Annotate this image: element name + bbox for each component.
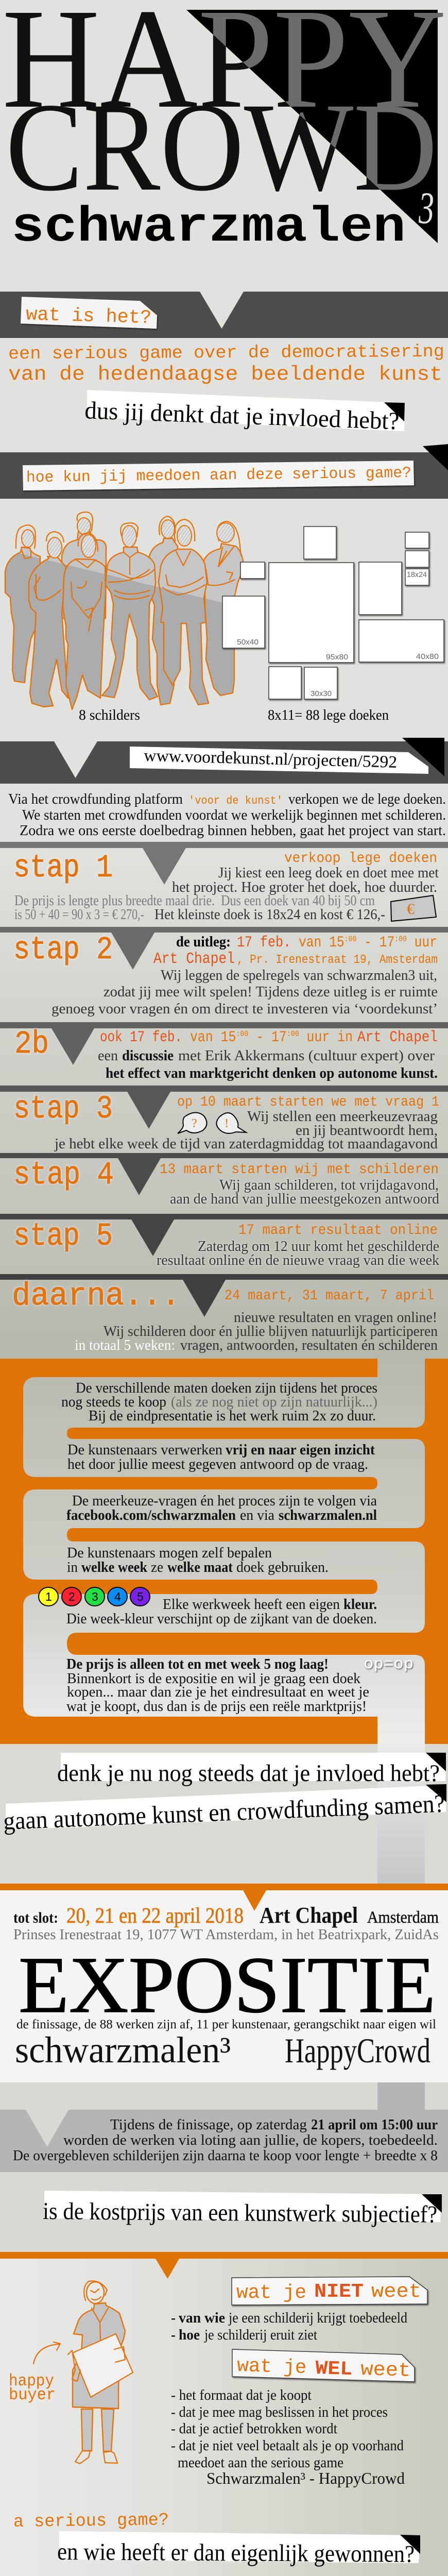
op=op label: op=op — [364, 1656, 413, 1673]
painter back left — [61, 512, 106, 618]
body: het project. Hoe groter het doek, hoe duurder. — [172, 879, 437, 895]
body: Het kleinste doek is 18x24 en kost € 126,- — [154, 907, 385, 923]
list: wel: Schwarzmalen³ - HappyCrowd — [206, 2469, 405, 2487]
heading: stap 1 — [13, 850, 113, 886]
painter front woman — [159, 519, 209, 705]
panel: exhibition — [0, 1884, 448, 2082]
date line: verkoop lege doeken — [284, 851, 437, 867]
ribbon text 5: kleur. — [343, 1597, 377, 1613]
winding ribbon — [23, 1359, 425, 1884]
icon: speech bubbles — [178, 1112, 246, 1133]
label happy buyer — [9, 2371, 56, 2404]
text: Tijdens de finissage, op zaterdag — [110, 2117, 307, 2133]
band: hoe kun jij meedoen — [0, 444, 448, 499]
ribbon text 2: vrij en naar eigen inzicht — [226, 1442, 375, 1458]
body: is 50 + 40 = 90 x 3 = € 270,- — [14, 907, 144, 923]
ribbon text 1: nog steeds te koop — [61, 1394, 166, 1410]
ribbon text 3: De meerkeuze-vragen én het proces zijn te volgen via — [72, 1493, 377, 1509]
heading: stap 3 — [13, 1091, 113, 1127]
ribbon text 6: wat je koopt, dus dan is de prijs een reële marktprijs! — [66, 1699, 367, 1715]
list: wel: - dat je actief betrokken wordt — [171, 2421, 337, 2437]
notch — [200, 292, 244, 329]
week colour circles: 1 — [45, 1590, 52, 1603]
heading EXPOSITIE: EXPOSITIE — [19, 1940, 436, 2029]
body: Wij stellen een meerkeuzevraag — [247, 1109, 438, 1125]
url text: www.voordekunst.nl/projecten/5292 — [144, 747, 398, 772]
canvas size labels: 50x40 — [237, 638, 259, 647]
body: je hebt elke week de tijd van zaterdagmiddag tot maandagavond — [54, 1136, 438, 1152]
steps background panel — [0, 848, 448, 1359]
date line: :00 — [287, 1029, 299, 1039]
tag: wat je NIET weet: NIET — [314, 2281, 364, 2303]
heading: stap 2 — [13, 931, 113, 968]
ribbon text 1: De verschillende maten doeken zijn tijdens het proces — [76, 1380, 377, 1396]
date line: uur in — [299, 1029, 353, 1046]
date lines: - 17 — [356, 934, 394, 952]
notch — [54, 741, 97, 778]
text: De overgebleven schilderijen zijn daarna te koop voor lengte + breedte x 8 — [13, 2148, 438, 2164]
body: Zaterdag om 12 uur komt het geschilderde — [198, 1239, 439, 1255]
step 2 — [0, 927, 448, 1017]
step 2b — [0, 1022, 448, 1081]
tag: wat je WEL weet: WEL — [315, 2358, 353, 2381]
step 5 — [0, 1214, 448, 1268]
canvas size labels: 40x80 — [416, 652, 439, 661]
body: Jij kiest een leeg doek en doet mee met — [218, 865, 439, 881]
date lines: uur — [407, 934, 437, 952]
ribbon text 4: ze — [151, 1560, 163, 1575]
body: vragen, antwoorden, resultaten én schilderen — [180, 1337, 438, 1353]
ribbon text 1 — [61, 1380, 377, 1424]
body: resultaat online én de nieuwe vraag van die week — [157, 1252, 439, 1268]
date line: 20, 21 en 22 april 2018 — [66, 1904, 244, 1928]
date lines — [153, 934, 438, 968]
body — [51, 968, 438, 1017]
date line: - 17 — [248, 1029, 287, 1046]
ribbon text 4: doek gebruiken. — [236, 1560, 329, 1575]
icon: euro note: € — [407, 901, 415, 918]
date lines: :00 — [344, 935, 356, 944]
tape: dus jij denkt — [84, 390, 405, 435]
ribbon text 2: het door jullie meest gegeven antwoord op de vraag. — [67, 1456, 368, 1472]
date line: :00 — [236, 1029, 248, 1039]
ribbon text 2: De kunstenaars verwerken — [67, 1442, 222, 1458]
orange panel background — [0, 1359, 448, 1744]
body: met Erik Akkermans (cultuur expert) over — [178, 1048, 435, 1064]
painter center man — [102, 523, 158, 700]
list: wel — [171, 2387, 405, 2487]
arrow to buyer — [33, 2342, 60, 2364]
address: Prinses Irenestraat 19, 1077 WT Amsterdam, in het Beatrixpark, ZuidAs — [13, 1927, 439, 1943]
ribbon text 4: welke week — [81, 1560, 147, 1575]
date line — [100, 1029, 438, 1046]
painter 2 — [29, 532, 68, 707]
tag: wat je WEL weet: wat je — [237, 2355, 307, 2379]
ribbon text 6 — [66, 1656, 369, 1715]
body: Wij schilderen door én jullie blijven natuurlijk participeren — [104, 1324, 438, 1340]
body — [170, 1177, 439, 1207]
ribbon text 6: De prijs is alleen tot en met week 5 nog laag! — [66, 1656, 329, 1672]
connector background — [0, 2082, 448, 2110]
captions: 8x11= 88 lege doeken — [268, 707, 389, 723]
date line — [13, 1903, 439, 1928]
body: Wij gaan schilderen, tot vrijdagavond, — [219, 1177, 439, 1193]
heading: stap 4 — [13, 1157, 114, 1193]
list: wel: - het formaat dat je koopt — [171, 2387, 312, 2403]
body: het effect van marktgericht denken op autonome kunst. — [106, 1065, 438, 1081]
ribbon text 5 — [66, 1597, 377, 1627]
text: 21 april om 15:00 uur — [311, 2117, 438, 2133]
panel: bottom buyer — [0, 2252, 448, 2576]
ribbon text 4 — [67, 1545, 329, 1575]
body: zodat jij mee wilt spelen! Tijdens deze uitleg is er ruimte — [104, 984, 438, 1000]
ribbon text 5: Elke werkweek heeft een eigen — [163, 1597, 340, 1613]
date line: ook 17 feb. — [100, 1029, 182, 1046]
date lines: de uitleg: — [176, 934, 231, 950]
icon: euro note — [391, 895, 436, 921]
date line: Amsterdam — [367, 1908, 439, 1927]
crowdfunding paragraph: 'voor de kunst' — [188, 794, 283, 807]
text — [13, 2117, 438, 2164]
tag text: hoe kun jij meedoen aan deze serious game? — [26, 465, 411, 487]
week colour circles: 3 — [92, 1590, 98, 1603]
list: wel: - dat je mee mag beslissen in het proces — [171, 2404, 388, 2420]
list: niet: je een schilderij krijgt toebedeeld — [228, 2310, 407, 2326]
list: niet: - — [171, 2327, 176, 2343]
step daarna — [0, 1274, 448, 1353]
body: discussie — [122, 1048, 174, 1064]
list: niet: - — [171, 2310, 176, 2326]
body: en jij beantwoordt hem, — [296, 1123, 438, 1139]
ribbon text 2 — [67, 1442, 375, 1472]
tag — [23, 461, 414, 490]
list: wel: - dat je niet veel betaalt als je op voorhand — [171, 2438, 404, 2454]
ribbon text 3: schwarzmalen.nl — [279, 1507, 377, 1523]
body — [98, 1048, 438, 1081]
list: niet: van wie — [179, 2310, 225, 2326]
ribbon text 3: en via — [240, 1507, 275, 1523]
body — [75, 1310, 438, 1353]
ribbon text 4: in — [67, 1560, 78, 1575]
heading: stap 5 — [13, 1218, 113, 1255]
date lines: :00 — [394, 935, 407, 944]
heading: daarna... — [12, 1278, 180, 1314]
ribbon text 6: kopen... maar dan zie je het eindresultaat en weet je — [67, 1684, 369, 1700]
canvas size labels: 30x30 — [311, 689, 332, 698]
painter woman with skirt — [63, 533, 106, 709]
step 4 — [0, 1153, 448, 1207]
tag — [21, 297, 157, 329]
illustration: 8 painters — [5, 512, 244, 709]
captions — [79, 707, 389, 723]
icon: speech bubbles: ? — [192, 1117, 197, 1130]
list: niet: hoe — [179, 2327, 200, 2343]
ribbon text 5: Die week-kleur verschijnt op de zijkant van de doeken. — [66, 1611, 377, 1627]
ribbon text 1: (als ze nog niet op zijn natuurlijk...) — [171, 1394, 377, 1410]
text: worden de werken via loting aan jullie, de kopers, toebedeeld. — [63, 2132, 438, 2148]
crowdfunding paragraph: Via het crowdfunding platform — [8, 791, 183, 807]
intro text orange: een serious game over de democratisering — [8, 343, 444, 364]
list: niet — [171, 2310, 407, 2343]
lower questions background — [0, 1744, 448, 1884]
icon: speech bubbles: ! — [225, 1117, 229, 1130]
canvas size labels — [237, 570, 439, 698]
illustration: happy buyer — [68, 2281, 133, 2464]
date line: Art Chapel — [260, 1903, 358, 1928]
step 1 — [0, 842, 448, 923]
captions: 8 schilders — [79, 707, 140, 723]
body: in totaal 5 weken: — [75, 1337, 175, 1353]
body: De prijs is lengte plus breedte maal drie. Dus een doek van 40 bij 50 cm — [14, 893, 375, 909]
list: wel: meedoet aan the serious game — [178, 2455, 343, 2471]
intro text orange — [8, 343, 444, 386]
header: title block — [2, 0, 446, 256]
body: aan de hand van jullie meestgekozen antwoord — [170, 1191, 439, 1207]
panel: finissage — [0, 2110, 448, 2172]
ribbon text 3: facebook.com/schwarzmalen — [66, 1507, 236, 1523]
label happy buyer: buyer — [9, 2385, 56, 2404]
crowdfunding paragraph: Zodra we ons eerste doelbedrag binnen hebben, gaat het project van start. — [20, 823, 446, 839]
intro text orange: van de hedendaagse beeldende kunst — [8, 363, 442, 386]
heading: 2b — [14, 1026, 49, 1062]
url tape — [130, 747, 428, 774]
crowdfunding paragraph — [8, 791, 446, 839]
tag: wat je WEL weet: weet — [360, 2359, 411, 2382]
question background — [0, 2172, 448, 2252]
painter 8 right — [203, 521, 244, 696]
ribbon text 6: Binnenkort is de expositie en wil je graag een doek — [67, 1671, 360, 1687]
painter 1 — [5, 525, 40, 683]
body — [54, 1109, 438, 1152]
painter back right — [149, 516, 178, 705]
body — [157, 1239, 439, 1268]
date lines: van 15 — [299, 934, 354, 952]
ribbon text 4: welke maat — [167, 1560, 233, 1575]
step 3 — [0, 1086, 448, 1152]
label happy buyer: happy — [9, 2371, 54, 2391]
body: Wij leggen de spelregels van schwarzmalen3 uit, — [161, 968, 437, 984]
date line: Art Chapel — [357, 1029, 438, 1046]
date line: van 15 — [190, 1029, 246, 1046]
tag: wat je WEL weet — [232, 2349, 415, 2382]
body: nieuwe resultaten en vragen online! — [234, 1310, 437, 1326]
band: url — [0, 738, 448, 784]
tag: wat je NIET weet: weet — [371, 2281, 421, 2303]
tape corner — [384, 402, 405, 421]
tag: wat je NIET weet: wat je — [236, 2282, 306, 2304]
black diagonal triangle — [186, 10, 438, 243]
week colour circles — [39, 1587, 150, 1606]
tag: wat je NIET weet — [232, 2277, 427, 2305]
ribbon text 4: De kunstenaars mogen zelf bepalen — [67, 1545, 272, 1561]
subline: de finissage, de 88 werken zijn af, 11 per kunstenaar, gerangschikt naar eigen wil — [16, 2018, 436, 2031]
tape: wie heeft gewonnen: en wie heeft er dan eigenlijk gewonnen? — [57, 2538, 415, 2568]
band: wat is het — [0, 292, 448, 338]
canvas size labels: 18x24 — [407, 570, 427, 579]
tag text: wat is het? — [26, 304, 152, 329]
logo schwarzmalen: schwarzmalen³ — [15, 2029, 231, 2071]
superscript 3: 3 — [418, 183, 434, 233]
body: een — [98, 1048, 118, 1064]
ribbon text 3 — [66, 1493, 377, 1523]
week colour circles: 4 — [114, 1590, 121, 1603]
corner triangle — [402, 738, 444, 776]
subtitle schwarzmalen: schwarzmalen — [11, 199, 406, 256]
week colour circles: 2 — [68, 1590, 75, 1603]
week colour circles: 5 — [137, 1590, 144, 1603]
list: niet: je schilderij eruit ziet — [204, 2327, 317, 2343]
body: genoeg voor vragen én om direct te investeren via ‘voordekunst’ — [51, 1001, 438, 1017]
date line: tot slot: — [13, 1909, 58, 1926]
canvas size labels: 95x80 — [326, 653, 348, 662]
corner triangle — [423, 444, 448, 470]
body — [14, 865, 439, 923]
date lines: 17 feb. — [237, 934, 291, 952]
a serious game: a serious game? — [13, 2511, 169, 2532]
ribbon text 1: Bij de eindpresentatie is het werk ruim 2x zo duur. — [89, 1408, 376, 1424]
tape text: dus jij denkt dat je invloed hebt? — [84, 397, 400, 435]
date lines: Art Chapel — [153, 950, 235, 968]
illustration: blank canvases — [222, 527, 444, 699]
